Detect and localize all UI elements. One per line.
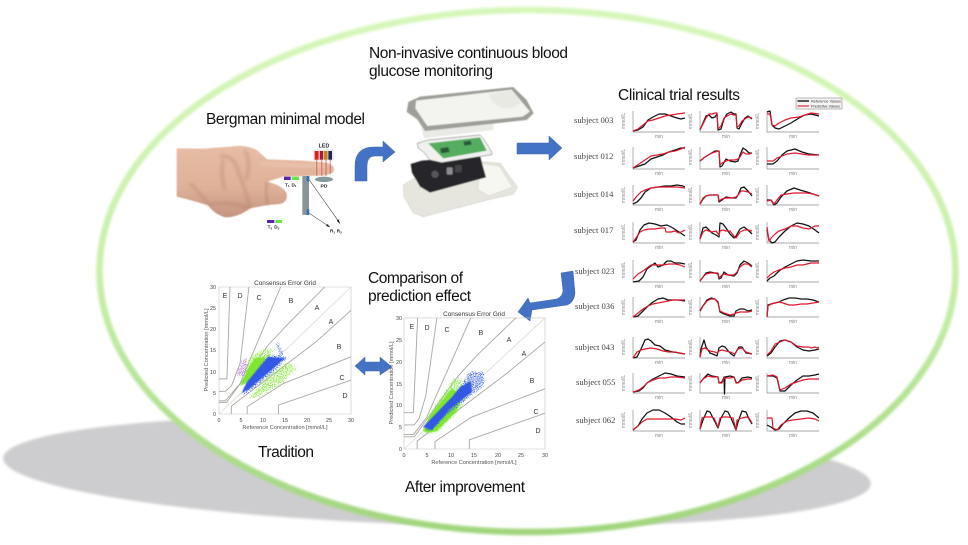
legend: reference and predictive values: Reference Values — [811, 100, 841, 104]
chart 023-2: mmol/L — [688, 262, 694, 278]
heading: Comparison of prediction effect — [368, 270, 472, 305]
chart 055-2: min — [722, 395, 730, 401]
chart: consensus error grid, after improvement: Consensus Error Grid — [443, 311, 505, 318]
chart 014-1: min — [655, 207, 663, 213]
zone letters: E — [410, 324, 415, 331]
zone letters: A — [329, 319, 334, 326]
chart 017-3 — [755, 222, 819, 251]
chart 003-1: min — [655, 134, 663, 140]
caption: After improvement: After improvement — [405, 479, 526, 496]
row: subject 043 — [575, 337, 819, 366]
green circuit board — [428, 137, 487, 158]
chart 014-1: mmol/L — [621, 187, 627, 203]
chart 043-1 — [621, 337, 685, 366]
chart 012-1 — [621, 147, 685, 177]
tick labels: 10 — [210, 370, 216, 376]
LED array — [314, 144, 333, 176]
chart 055-3: mmol/L — [755, 375, 761, 391]
emitter swatches T1 D1: 1 — [288, 184, 290, 188]
photodiode — [315, 177, 333, 189]
emitter swatches T2 D2: D — [274, 225, 278, 230]
chart 043-2: mmol/L — [688, 339, 694, 355]
zone letters: E — [223, 293, 228, 300]
caption: Tradition: Tradition — [258, 444, 314, 461]
chart 043-2 — [688, 337, 752, 366]
chart: consensus error grid, tradition — [204, 280, 354, 431]
illustration: finger sensor diagram — [177, 144, 342, 234]
row: subject 017 — [574, 222, 819, 251]
chart 012-2: mmol/L — [688, 149, 694, 165]
row: subject 036: subject 036 — [575, 301, 615, 311]
emitter swatches T1 D1: T — [285, 182, 288, 187]
row: subject 017: subject 017 — [574, 225, 614, 235]
chart 014-3 — [755, 185, 819, 213]
chart 062-1: min — [655, 433, 663, 439]
LED array: LED — [319, 144, 329, 150]
zone letters: A — [522, 351, 527, 358]
row: subject 012: subject 012 — [574, 151, 613, 161]
receiver arrows R1 R2 — [309, 180, 342, 234]
scatter: dense green core — [240, 357, 266, 386]
chart 003-2: mmol/L — [688, 113, 694, 129]
chart 036-1 — [621, 297, 685, 325]
emitter swatches T1 D1: D — [292, 182, 296, 187]
chart 017-3: min — [789, 245, 797, 251]
arrow: bent up-right — [355, 141, 395, 181]
arrow: curved down-left — [518, 271, 575, 321]
sensor holes — [431, 165, 462, 178]
top cover skirt — [419, 117, 493, 138]
tick labels: 30 — [210, 285, 216, 291]
bottom case — [403, 162, 517, 217]
chart 023-1: mmol/L — [621, 262, 627, 278]
row: subject 014 — [574, 185, 819, 213]
legend: reference and predictive values — [796, 98, 842, 109]
chart: consensus error grid, tradition: Reference Concentration [mmol/L] — [242, 425, 328, 431]
row: subject 055 — [576, 373, 819, 401]
chart: consensus error grid, tradition: Consensus Error Grid — [254, 280, 316, 287]
chart 055-1 — [621, 373, 685, 401]
tick labels — [396, 316, 548, 459]
chart 017-1: min — [655, 245, 663, 251]
chart 036-1: mmol/L — [621, 299, 627, 315]
row: subject 062 — [576, 410, 819, 439]
chart 043-3 — [755, 337, 819, 366]
chart 017-1 — [621, 222, 685, 251]
grid frame and zone lines — [404, 318, 545, 449]
zone letters: D — [237, 293, 243, 300]
chart 014-3: mmol/L — [755, 187, 761, 203]
tick labels: 20 — [495, 453, 501, 459]
chart 062-2: mmol/L — [688, 412, 694, 428]
chart: consensus error grid, after improvement — [389, 311, 548, 466]
grid frame and zone lines — [219, 287, 351, 414]
scatter: purple points — [235, 354, 249, 379]
chart 043-1: mmol/L — [621, 339, 627, 355]
heading: Non-invasive continuous blood glucose monitoring: glucose monitoring — [369, 63, 493, 80]
chart 003-2 — [688, 111, 752, 140]
chart 003-3: mmol/L — [755, 113, 761, 129]
tick labels: 20 — [304, 418, 310, 424]
chart 062-2: min — [722, 433, 730, 439]
zone letters — [223, 293, 348, 400]
chart 017-2: mmol/L — [688, 224, 694, 240]
chart 012-1: min — [655, 171, 663, 177]
top cover surface — [415, 90, 530, 126]
chart 036-3 — [755, 297, 819, 325]
zone letters: A — [507, 337, 512, 344]
chart: consensus error grid, tradition: Predicted Concentration [mmol/L] — [204, 308, 210, 392]
chart 055-1: min — [655, 395, 663, 401]
tick labels: 0 — [213, 412, 216, 418]
tick labels: 15 — [396, 382, 402, 388]
hand — [177, 146, 334, 217]
tick labels: 25 — [518, 453, 524, 459]
zone letters: D — [424, 325, 430, 332]
black inner frame — [411, 156, 486, 193]
chart 014-2: mmol/L — [688, 187, 694, 203]
tick labels: 10 — [396, 403, 402, 409]
tick labels: 0 — [218, 418, 220, 424]
zone letters: D — [342, 393, 348, 400]
emitter swatches T2 D2 — [267, 220, 282, 230]
chart 062-3 — [755, 410, 819, 439]
zone letters: C — [256, 295, 262, 302]
row: subject 055: subject 055 — [576, 377, 615, 387]
scatter: sparse blue points — [422, 370, 486, 434]
chart 023-1: min — [655, 284, 663, 290]
emitter swatches T2 D2: T — [268, 225, 271, 230]
receiver arrows R1 R2: R — [337, 229, 341, 234]
tick labels: 20 — [210, 327, 216, 333]
heading: Clinical trial results: Clinical trial results — [618, 87, 740, 104]
white board carrier — [417, 135, 492, 163]
tick labels: 15 — [471, 453, 477, 459]
zone letters: C — [533, 409, 539, 416]
row: subject 012 — [574, 147, 819, 177]
chart 055-2: mmol/L — [688, 375, 694, 391]
chart 014-2: min — [722, 207, 730, 213]
zone letters: A — [315, 305, 320, 312]
zone letters: B — [479, 330, 484, 337]
chart 055-1: mmol/L — [621, 375, 627, 391]
chart 036-2: mmol/L — [688, 299, 694, 315]
chart 043-3: min — [789, 360, 797, 366]
chart 017-1: mmol/L — [621, 224, 627, 240]
zone letters: D — [535, 428, 541, 435]
illustration: exploded wearable device — [403, 87, 534, 217]
chart 062-1: mmol/L — [621, 412, 627, 428]
receiver arrows R1 R2: 1 — [333, 230, 335, 234]
chart 036-3: mmol/L — [755, 299, 761, 315]
chart 003-1 — [621, 111, 685, 140]
chart 062-3: min — [789, 433, 797, 439]
row: subject 003 — [574, 111, 819, 140]
chart 023-2 — [688, 260, 752, 290]
chart 012-2 — [688, 147, 752, 177]
tick labels: 30 — [348, 418, 354, 424]
chips — [440, 141, 472, 153]
chart 036-1: min — [655, 319, 663, 325]
chart 014-1 — [621, 185, 685, 213]
row: subject 014: subject 014 — [574, 189, 614, 199]
sensor bar — [302, 176, 309, 215]
legend: reference and predictive values: Predictive Values — [811, 104, 840, 108]
arrow: right — [517, 136, 562, 160]
chart 017-2 — [688, 222, 752, 251]
chart 023-1 — [621, 260, 685, 290]
chart 017-3: mmol/L — [755, 224, 761, 240]
heading: Bergman minimal model: Bergman minimal model — [206, 111, 365, 128]
ground shadow — [2, 404, 872, 538]
receiver arrows R1 R2: 2 — [340, 230, 342, 234]
row: subject 043: subject 043 — [575, 342, 614, 352]
chart 036-3: min — [789, 319, 797, 325]
chart: consensus error grid, after improvement: Reference Concentration [mmol/L] — [431, 460, 517, 466]
chart 036-2 — [688, 297, 752, 325]
chart 003-2: min — [722, 134, 730, 140]
tick labels: 5 — [213, 391, 216, 397]
scatter: dense blue core — [242, 357, 285, 392]
tick labels: 25 — [210, 306, 216, 312]
receiver arrows R1 R2: R — [330, 229, 333, 234]
chart 012-3: mmol/L — [755, 149, 761, 165]
tick labels: 0 — [399, 447, 402, 453]
tick labels: 0 — [402, 453, 406, 459]
chart 012-3: min — [789, 171, 797, 177]
row: subject 023 — [575, 260, 819, 290]
chart 017-2: min — [722, 245, 730, 251]
chart 055-3: min — [789, 395, 797, 401]
zone letters: B — [530, 378, 535, 385]
heading: Non-invasive continuous blood glucose monitoring — [369, 45, 568, 80]
chart 055-2 — [688, 373, 752, 401]
chart 062-3: mmol/L — [755, 412, 761, 428]
top cover rim — [407, 87, 534, 131]
chart 023-3: mmol/L — [755, 262, 761, 278]
scatter: green points — [420, 376, 470, 436]
tick labels — [210, 285, 354, 424]
tick labels: 5 — [399, 425, 402, 431]
chart 043-3: mmol/L — [755, 339, 761, 355]
emitter swatches T1 D1 — [284, 177, 299, 188]
scatter: sparse blue points — [238, 340, 292, 398]
tick labels: 25 — [396, 338, 402, 344]
chart 023-3 — [755, 260, 819, 290]
chart 012-1: mmol/L — [621, 149, 627, 165]
chart 012-3 — [755, 147, 819, 177]
emitter swatches T2 D2: 2 — [278, 226, 280, 230]
chart 062-2 — [688, 410, 752, 439]
chart 012-2: min — [722, 171, 730, 177]
row: subject 036 — [575, 297, 819, 325]
tick labels: 10 — [260, 418, 266, 424]
tick labels: 30 — [396, 316, 402, 322]
zone letters: B — [337, 344, 342, 351]
chart 043-2: min — [722, 360, 730, 366]
scatter: sparse green points — [238, 346, 302, 402]
tick labels: 10 — [448, 453, 454, 459]
chart 003-1: mmol/L — [621, 113, 627, 129]
tick labels: 15 — [210, 348, 216, 354]
chart 014-2 — [688, 185, 752, 213]
heading: Non-invasive continuous blood glucose monitoring: Non-invasive continuous blood — [369, 45, 568, 62]
bottom case inner — [477, 163, 513, 196]
tick labels: 25 — [326, 418, 332, 424]
arrow: double-headed — [355, 357, 392, 375]
chart 023-3: min — [789, 284, 797, 290]
emitter swatches T2 D2: 2 — [271, 226, 273, 230]
heading: Comparison of prediction effect: Comparison of — [368, 270, 464, 287]
photodiode: PD — [321, 183, 328, 189]
chart 023-2: min — [722, 284, 730, 290]
zone letters: B — [289, 298, 294, 305]
chart 036-2: min — [722, 319, 730, 325]
scatter: dense green core — [423, 388, 462, 433]
tick labels: 5 — [426, 453, 428, 459]
scatter: dense blue core — [423, 381, 472, 430]
tick labels: 15 — [282, 418, 288, 424]
row: subject 062: subject 062 — [576, 415, 615, 425]
chart 003-3: min — [789, 134, 797, 140]
chart 043-1: min — [655, 360, 663, 366]
tick labels: 20 — [396, 360, 402, 366]
top cover glossy patch — [488, 90, 522, 108]
tick labels: 30 — [542, 453, 548, 459]
heading: Comparison of prediction effect: prediction effect — [368, 288, 472, 305]
chart: consensus error grid, after improvement: Predicted Concentration [mmol/L] — [389, 341, 395, 425]
chart 062-1 — [621, 410, 685, 439]
chart 003-3 — [755, 111, 819, 140]
chart 014-3: min — [789, 207, 797, 213]
tick labels: 5 — [240, 418, 242, 424]
zone letters: C — [444, 327, 450, 334]
zone letters — [410, 324, 541, 435]
row: subject 003: subject 003 — [574, 115, 613, 125]
chart 055-3 — [755, 373, 819, 401]
emitter swatches T1 D1: 1 — [295, 184, 297, 188]
zone letters: C — [339, 375, 345, 382]
row: subject 023: subject 023 — [575, 266, 614, 276]
